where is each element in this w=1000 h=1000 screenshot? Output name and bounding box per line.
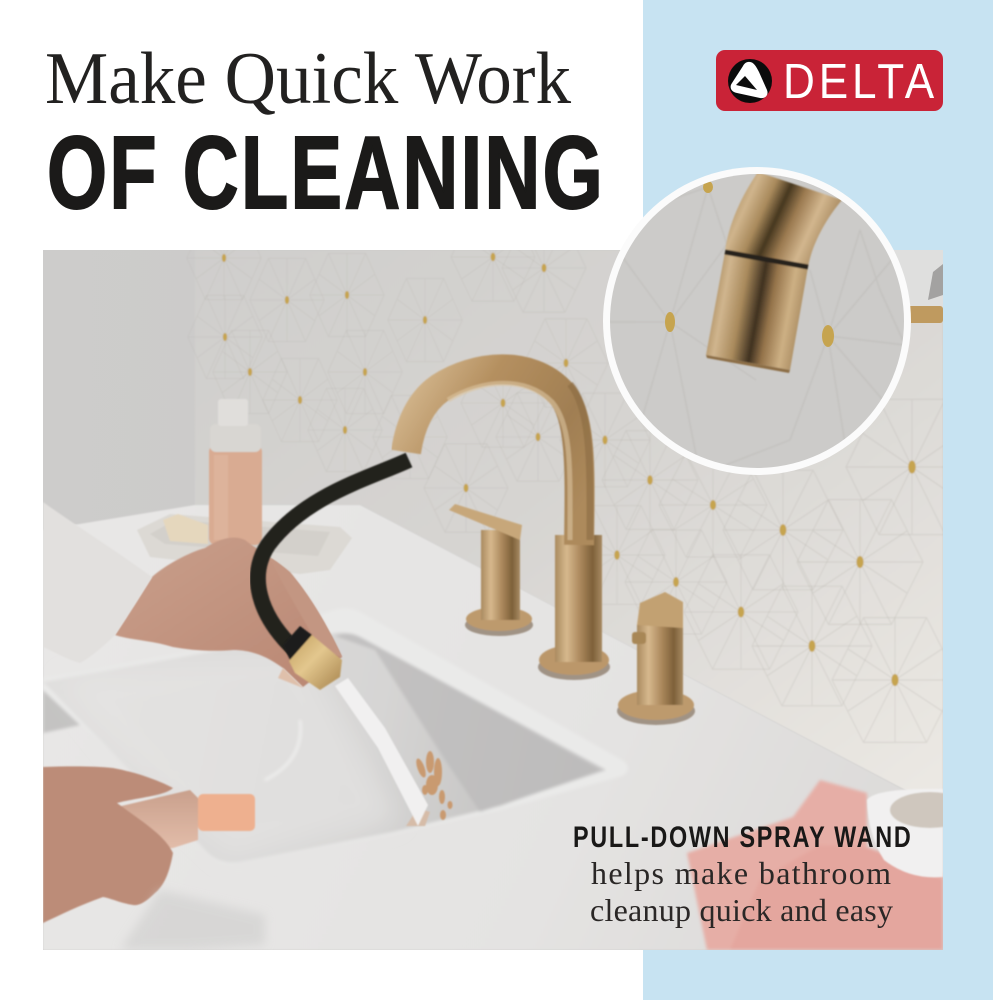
icon: delta emblem	[728, 59, 772, 103]
faucet left handle	[449, 504, 533, 636]
spout close-up	[706, 172, 842, 373]
panel: bathroom photo	[43, 213, 978, 950]
faucet spout	[406, 369, 610, 680]
logo red badge	[716, 50, 943, 111]
fingers over hose	[270, 558, 342, 657]
lower hand with bottle	[43, 766, 255, 923]
callout heading: PULL-DOWN SPRAY WAND	[573, 820, 911, 854]
soap bottle	[209, 399, 262, 545]
callout text	[573, 820, 911, 928]
towel	[687, 780, 943, 950]
logo wordmark: DELTA	[783, 54, 934, 109]
pull-down hose	[258, 460, 409, 650]
panel: close-up circle	[603, 167, 911, 475]
bottle shadow on counter	[120, 890, 265, 950]
lower hand	[43, 766, 173, 923]
mirror corner top right	[890, 250, 943, 323]
spray wand head	[278, 626, 342, 690]
hand holding wand	[115, 538, 342, 687]
callout line one: helps make bathroom	[591, 855, 891, 891]
round white dish	[866, 789, 943, 878]
faucet	[406, 369, 695, 725]
sleeve	[43, 502, 152, 635]
circle contents	[603, 167, 911, 475]
title line two: OF CLEANING	[47, 116, 603, 231]
white ring	[603, 167, 911, 475]
sink basin	[43, 632, 604, 860]
faucet right handle	[617, 592, 695, 725]
tile gold dots	[665, 181, 834, 347]
title line one: Make Quick Work	[45, 38, 571, 120]
callout line two: cleanup quick and easy	[590, 892, 893, 928]
Delta logo	[716, 50, 943, 111]
tile backsplash	[221, 251, 943, 790]
soap dish	[137, 514, 352, 574]
light blue side panel	[643, 0, 993, 1000]
photo background wall	[43, 250, 943, 950]
countertop	[43, 505, 943, 950]
small bottle	[117, 790, 198, 850]
water stream	[335, 678, 428, 826]
stain on sink	[406, 751, 452, 826]
title	[45, 38, 603, 231]
